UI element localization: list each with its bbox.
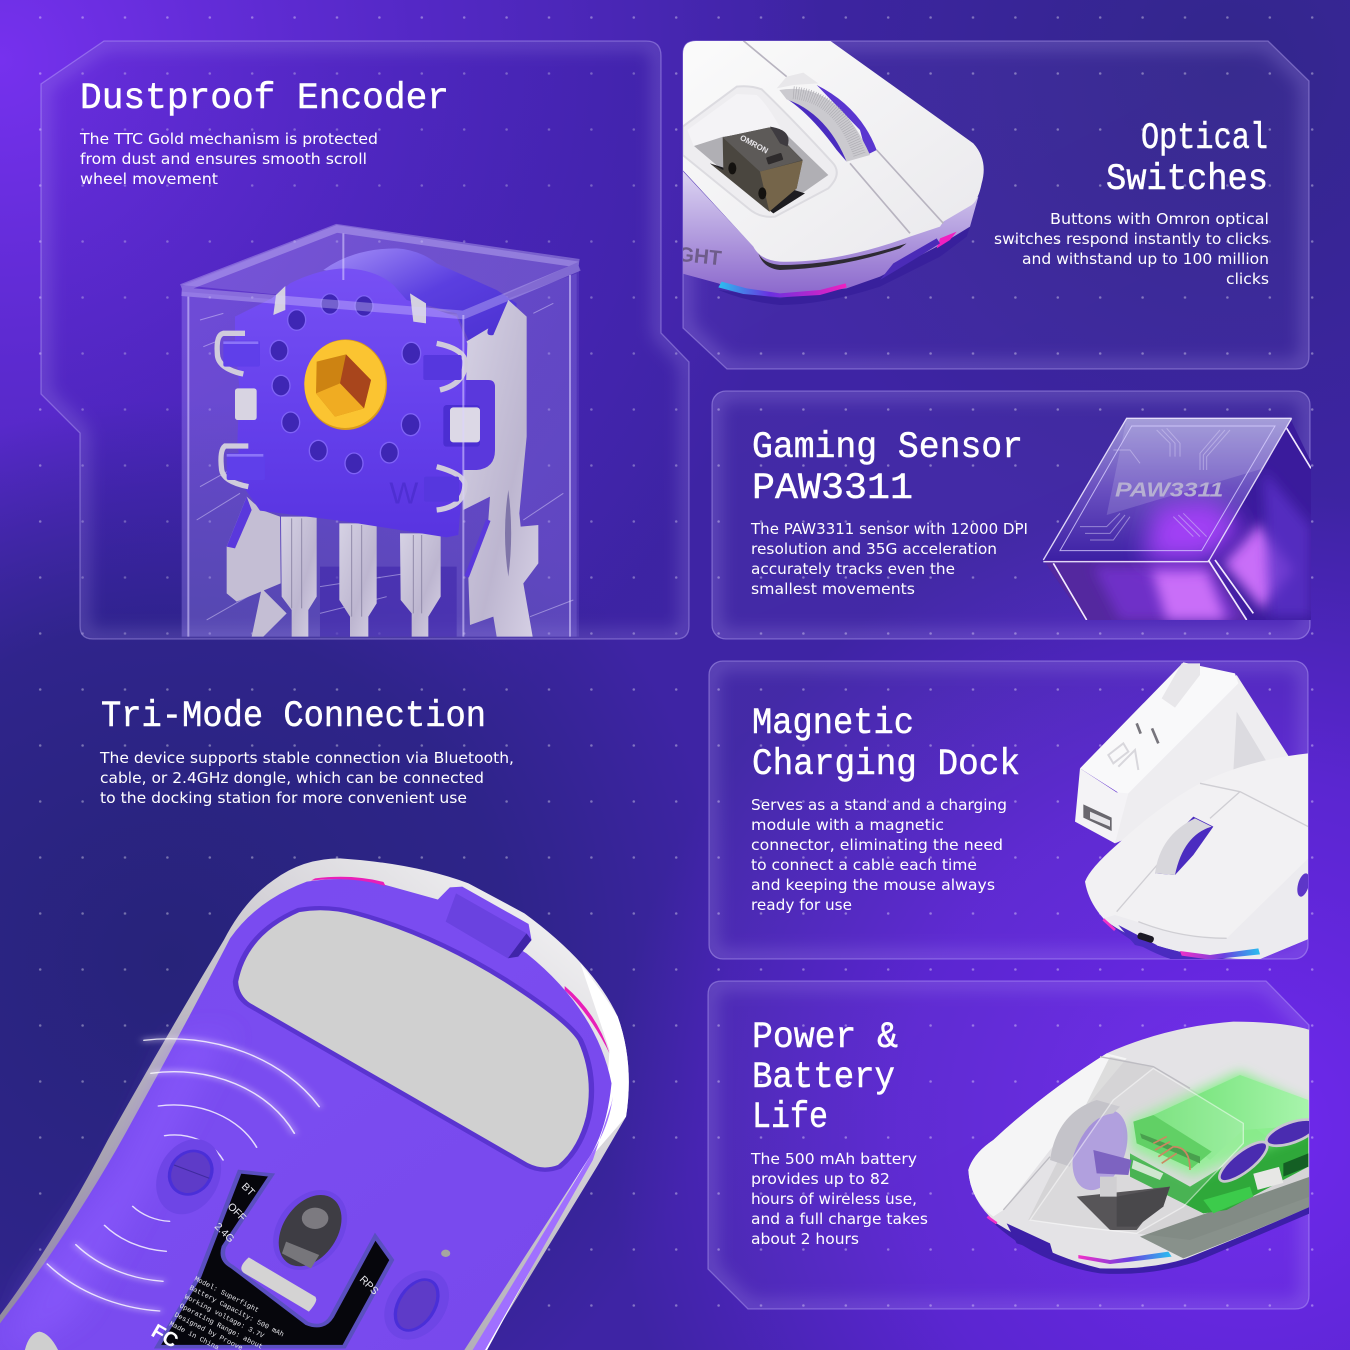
heading: Gaming Sensor PAW3311 xyxy=(752,427,1023,510)
text: sensor description: resolution and 35G acceleration xyxy=(751,540,997,558)
panel: dustproof encoder xyxy=(41,41,689,639)
illustration: charging dock and white mouse xyxy=(1075,662,1312,962)
panel: magnetic charging dock xyxy=(709,661,1312,962)
printed specification block xyxy=(148,1276,285,1350)
printed labels on base: OFF xyxy=(225,1201,248,1224)
text: sensor description xyxy=(750,520,1028,598)
printed label: PAW3311: PAW3311 xyxy=(1115,480,1223,502)
section: tri-mode connection xyxy=(0,696,629,1350)
text: optical description xyxy=(994,210,1269,288)
printed label: LIGHT: GHT xyxy=(677,243,723,270)
text: sensor description: smallest movements xyxy=(751,580,915,598)
heading: Gaming Sensor PAW3311: PAW3311 xyxy=(752,468,913,510)
text: sensor description: accurately tracks even the xyxy=(751,560,955,578)
panel: power and battery life xyxy=(708,981,1320,1309)
heading: Dustproof Encoder: Dustproof Encoder xyxy=(80,78,449,120)
text: tri-mode description: cable, or 2.4GHz dongle, which can be connected xyxy=(100,769,484,787)
heading: Tri-Mode Connection: Tri-Mode Connection xyxy=(101,696,486,738)
printed labels on base: BT xyxy=(239,1181,257,1199)
text: sensor description: The PAW3311 sensor with 12000 DPI xyxy=(750,520,1028,538)
illustration: transparent mouse with green battery xyxy=(968,1022,1320,1274)
printed label: OMRON: OMRON xyxy=(738,133,770,156)
printed specification block: Model: Superfight xyxy=(193,1276,260,1315)
heading: Magnetic Charging Dock xyxy=(752,703,1020,786)
printed labels on base: 2.4G xyxy=(212,1221,236,1245)
printed labels on base: RPS xyxy=(357,1274,381,1297)
heading: Optical Switches xyxy=(1106,118,1268,201)
text: battery description: provides up to 82 xyxy=(751,1170,890,1188)
panel: gaming sensor xyxy=(712,391,1312,639)
text: battery description: and a full charge takes xyxy=(751,1210,928,1228)
heading: Magnetic Charging Dock: Charging Dock xyxy=(752,744,1020,786)
heading: Gaming Sensor PAW3311: Gaming Sensor xyxy=(752,427,1023,469)
heading: Optical Switches: Switches xyxy=(1106,159,1268,201)
text: optical description: Buttons with Omron optical xyxy=(1050,210,1269,228)
printed specification block: Working voltage: 3.7V xyxy=(183,1294,266,1341)
text: battery description: about 2 hours xyxy=(751,1230,859,1248)
heading: Power & Battery Life: Life xyxy=(752,1097,828,1139)
text: dock description: ready for use xyxy=(751,896,852,914)
text: tri-mode description: to the docking station for more convenient use xyxy=(100,789,467,807)
text: tri-mode description xyxy=(99,749,514,807)
printed labels on base xyxy=(212,1181,381,1297)
illustration: glass sensor cube xyxy=(1043,418,1312,620)
illustration: white mouse with Omron switch xyxy=(677,41,984,305)
illustration: underside of purple mouse xyxy=(0,858,629,1350)
text: dustproof description: The TTC Gold mechanism is protected xyxy=(79,130,378,148)
heading: Power & Battery Life: Power & xyxy=(752,1017,898,1059)
text: dock description xyxy=(751,796,1007,914)
logo mark on encoder: W xyxy=(389,476,418,510)
text: dock description: connector, eliminating the need xyxy=(751,836,1003,854)
text: battery description xyxy=(750,1150,928,1248)
heading: Power & Battery Life: Battery xyxy=(752,1057,895,1099)
panel: optical switches xyxy=(677,41,1309,369)
heading: Optical Switches: Optical xyxy=(1141,118,1268,160)
text: tri-mode description: The device supports stable connection via Bluetooth, xyxy=(99,749,514,767)
text: dustproof description: wheel movement xyxy=(80,170,218,188)
text: optical description: clicks xyxy=(1226,270,1269,288)
text: battery description: The 500 mAh battery xyxy=(750,1150,917,1168)
text: dock description: and keeping the mouse always xyxy=(751,876,995,894)
text: dock description: Serves as a stand and a charging xyxy=(751,796,1007,814)
heading: Power & Battery Life xyxy=(752,1017,898,1139)
text: dock description: to connect a cable each time xyxy=(751,856,977,874)
text: dustproof description: from dust and ensures smooth scroll xyxy=(80,150,367,168)
text: optical description: switches respond instantly to clicks xyxy=(994,230,1269,248)
text: optical description: and withstand up to 100 million xyxy=(1022,250,1269,268)
text: battery description: hours of wireless use, xyxy=(751,1190,917,1208)
text: dustproof description xyxy=(79,130,378,188)
printed specification block: Battery Capacity: 500 mAh xyxy=(188,1285,285,1339)
text: dock description: module with a magnetic xyxy=(751,816,944,834)
heading: Magnetic Charging Dock: Magnetic xyxy=(752,703,914,745)
illustration: encoder in glass case xyxy=(182,225,579,637)
